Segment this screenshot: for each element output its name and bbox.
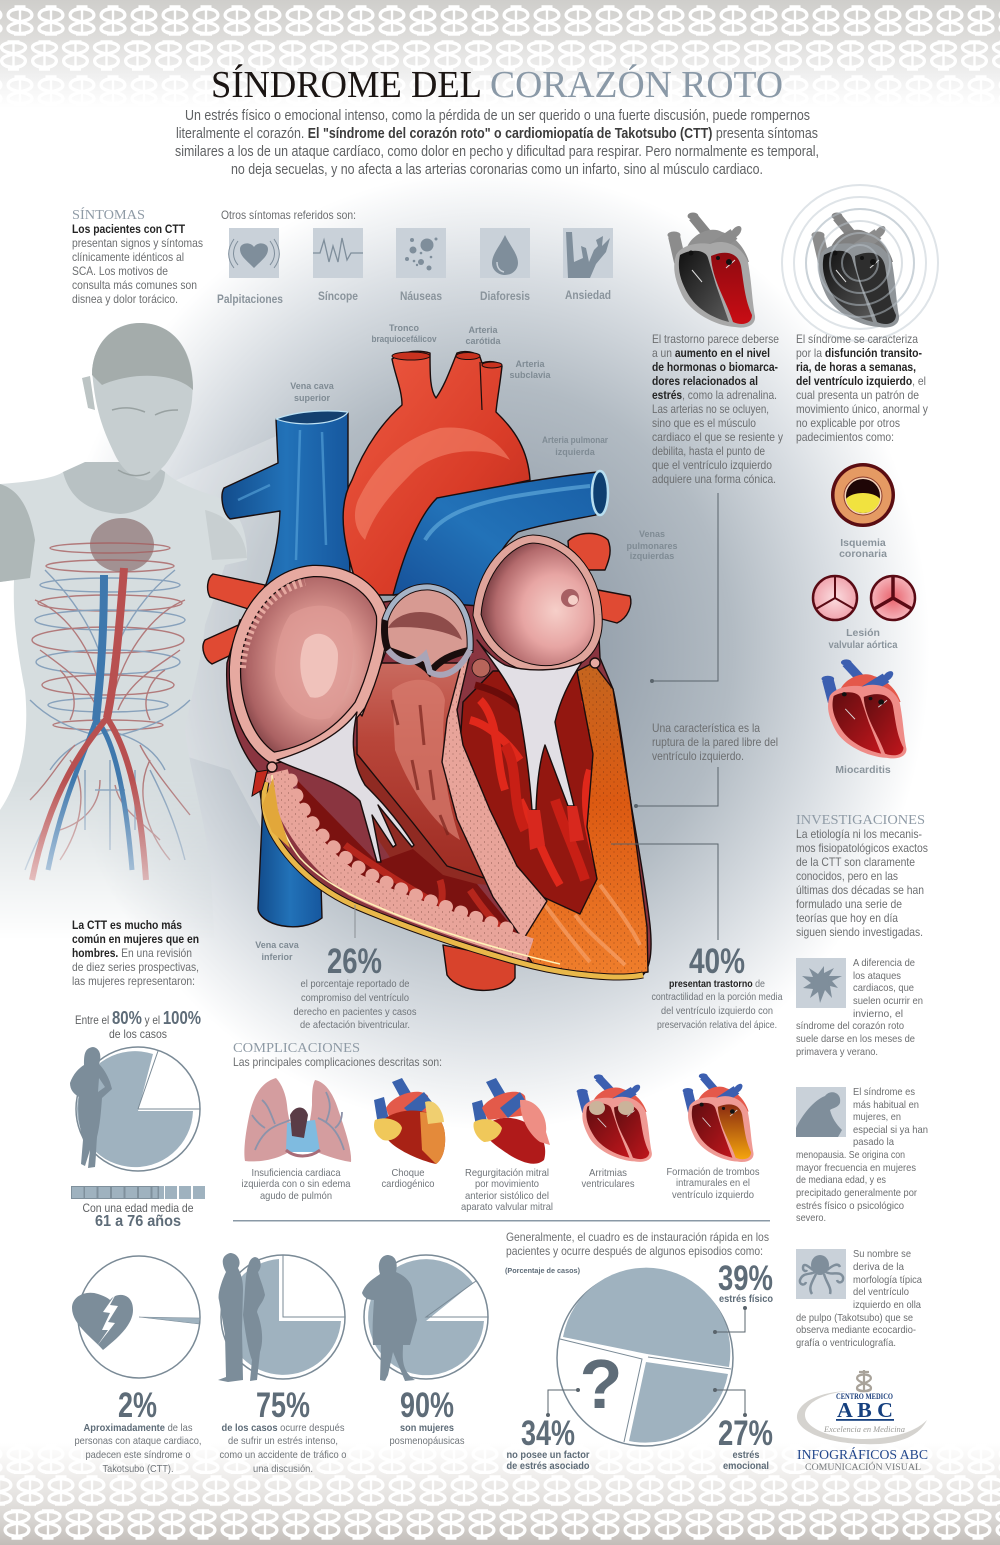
text: 40 por ciento: preservación relativa del ápice. [657,1019,777,1031]
labels: complicaciones: ventriculares [582,1178,634,1190]
label: 27 por ciento: 27% [718,1414,773,1453]
panel: síntomas text [72,206,203,306]
icon: miocarditis [822,659,906,758]
note: menopausia: El síndrome es [853,1086,915,1098]
panel: investigaciones: mos fisiopatológicos exactos [796,841,928,855]
labels: síntomas: Náuseas [400,289,442,303]
text: trastorno: dores relacionados al [652,374,758,388]
labels: complicaciones: Regurgitación mitral [465,1167,549,1179]
panel: síntomas text: SÍNTOMAS [72,206,145,223]
scalloped right ventricular wall [276,772,530,950]
panel: investigaciones: formulado una serie de [796,897,902,911]
label: isquemia coronaria: Isquemia [840,537,886,549]
labels: síntomas: Palpitaciones [217,292,283,306]
panel: síntomas text: clínicamente idénticos al [72,250,184,264]
text: 26 por ciento: compromiso del ventrículo [301,992,409,1004]
icon: gray heart with concentric rings [782,185,938,341]
labels: complicaciones: Formación de trombos [666,1166,760,1178]
label: lesión valvular: Lesión [846,627,880,639]
text: ruptura: ventrículo izquierdo. [652,749,744,763]
icon: pulpo [796,1249,846,1299]
logo: centro medico ABC [797,1370,928,1473]
text: trastorno [652,332,783,486]
text: trastorno: estrés, como la adrenalina. [652,388,777,402]
vessel: vena cava superior [222,411,350,592]
panel: síntomas text: presentan signos y síntomas [72,236,203,250]
text: trastorno: que el ventrículo izquierdo [652,458,772,472]
text: ruptura [652,721,778,763]
labels: heart anatomy: izquierdas [630,551,674,561]
note: takotsubo [796,1248,922,1349]
labels: complicaciones: intramurales en el [676,1177,750,1189]
text: 40 por ciento: presentan trastorno de [669,978,765,990]
text: edad media: Con una edad media de [82,1201,194,1215]
labels: síntomas: Ansiedad [565,288,611,302]
panel: investigaciones: siguen siendo investigadas. [796,925,923,939]
text: 75 por ciento: una discusión. [253,1463,313,1475]
title: CORAZÓN ROTO [490,64,783,106]
text: 2 por ciento [74,1386,202,1475]
labels: síntomas [217,288,611,306]
vessel: arteria pulmonar izquierda [393,471,608,620]
labels: heart anatomy: Venas [639,529,665,539]
text: disfunción: ria, de horas a semanas, [796,360,916,374]
text: disfunción: del ventrículo izquierdo, el [796,374,926,388]
labels: complicaciones: por movimiento [475,1178,539,1190]
text: 75 por ciento: de sufrir un estrés intenso, [228,1435,338,1447]
panel: investigaciones: conocidos, pero en las [796,869,898,883]
heart anatomical illustration [203,351,651,990]
text: mujeres: La CTT es mucho más [72,918,182,932]
panel: síntomas text: disnea y dolor torácico. [72,292,178,306]
icon: gray heart with red ventricle [668,212,755,328]
labels: heart anatomy: Vena cava [290,381,335,391]
chart: pie estrés [557,1268,733,1446]
text: 2 por ciento: personas con ataque cardiaco, [74,1435,202,1447]
chart: pie 2 por ciento [72,1256,200,1378]
human body figure with circulatory system [0,323,247,950]
note: menopausia: más habitual en [853,1099,919,1111]
panel: investigaciones: La etiología ni los mecanis- [796,827,922,841]
note: estacionalidad: suele darse en los meses de [796,1033,915,1045]
logo: centro medico ABC: A B C [837,1398,893,1422]
title [211,64,783,106]
text: 40 por ciento [652,942,783,1031]
labels: complicaciones: Choque [392,1167,425,1179]
note: estacionalidad: cardiacos, que [853,982,914,994]
labels: complicaciones: Arritmias [589,1167,627,1179]
labels: heart anatomy: carótida [465,336,501,346]
text: ruptura: Una característica es la [652,721,760,735]
text: 40 por ciento: 40% [689,942,745,981]
icon: silueta de pareja [218,1253,265,1382]
note: menopausia: mujeres, en [853,1111,901,1123]
icon: mujer sentada [796,1087,846,1137]
chart: age range bar [71,1186,205,1199]
text: trastorno: adquiere una forma cónica. [652,472,776,486]
labels: complicaciones [242,1166,760,1213]
note: menopausia: de mediana edad, y es [796,1174,886,1186]
labels: complicaciones: anterior sistólico del [465,1190,549,1202]
label: 27 por ciento: estrés [732,1449,760,1461]
chart: pie mujeres [70,1047,200,1171]
logo: centro medico ABC: COMUNICACIÓN VISUAL [805,1461,921,1473]
note: takotsubo: del ventrículo [853,1286,909,1298]
labels: síntomas: Diaforesis [480,289,530,303]
note: estacionalidad: los ataques [853,970,901,982]
label: 39 por ciento: 39% [718,1259,773,1298]
note: menopausia: severo. [796,1212,826,1224]
icon: arritmias ventriculares [577,1074,652,1162]
note: takotsubo: morfología típica [853,1274,922,1286]
icon: silueta de mujer [70,1047,112,1168]
text: disfunción [796,332,928,444]
text: trastorno: de hormonas o biomarca- [652,360,778,374]
right ventricle cavity [297,745,523,940]
panel: investigaciones [796,813,928,939]
icon: corazón roto [72,1292,133,1350]
icon: válvula aórtica normal [813,576,857,620]
note: estacionalidad: primavera y verano. [796,1046,878,1058]
intro paragraph [175,108,819,178]
text: trastorno: debilita, hasta el punto de [652,444,765,458]
footer pattern band [0,1443,1000,1545]
interventricular septum [355,622,547,940]
title: SÍNDROME DEL [211,64,482,106]
text: 2 por ciento: Takotsubo (CTT). [102,1463,174,1475]
panel: complicaciones heading: Las principales complicaciones descritas son: [233,1055,442,1069]
labels: heart anatomy: Arteria [515,359,545,369]
labels: heart anatomy: braquiocefálicov [372,334,436,344]
text: instauración: Generalmente, el cuadro es de instauración rápida en los [506,1230,769,1244]
icon: náuseas [396,228,446,278]
icon: síncope [313,228,363,278]
note: menopausia: estrés físico o psicológico [796,1200,904,1212]
vessel: aorta inferior [443,945,515,990]
label: 34 por ciento: de estrés asociado [506,1460,590,1472]
icon: pulmones [244,1078,351,1162]
text: 90 por ciento: son mujeres [400,1422,454,1434]
text: edad media [82,1201,194,1230]
text: mujeres [72,918,199,988]
yellow pericardium band [252,770,643,977]
labels: complicaciones: aparato valvular mitral [461,1201,553,1213]
text: trastorno: El trastorno parece deberse [652,332,779,346]
intro paragraph: Un estrés físico o emocional intenso, como la pérdida de un ser querido o una fuerte discusión, puede rompernos [185,108,810,124]
icon: signo de interrogación: ? [580,1345,622,1423]
text: 2 por ciento: Aproximadamente de las [84,1422,192,1434]
note: menopausia: menopausia. Se origina con [796,1149,905,1161]
text: disfunción: cual presenta un patrón de [796,388,919,402]
text: 90 por ciento [390,1386,464,1447]
label: isquemia coronaria: coronaria [839,548,887,560]
labels: heart anatomy [255,323,678,962]
text: instauración: pacientes y ocurre después de algunos episodios como: [506,1244,763,1258]
icon: ansiedad [563,228,613,278]
central outflow chamber [357,663,487,879]
intro paragraph: similares a los de un ataque cardíaco, como dolor en pecho y dificultad para respirar. Pero normalmente es temporal, [175,144,819,160]
text: disfunción: por la disfunción transito- [796,346,922,360]
text: mujeres: las mujeres representaron: [72,974,195,988]
text: 40 por ciento: contractilidad en la porción media [652,991,783,1003]
note: takotsubo: deriva de la [853,1261,904,1273]
note: estacionalidad: A diferencia de [853,957,915,969]
intro paragraph: literalmente el corazón. El "síndrome del corazón roto" o cardiomiopatía de Takotsubo (CTT) presenta síntomas [176,126,818,142]
text: disfunción: movimiento único, anormal y [796,402,928,416]
labels: heart anatomy: Tronco [389,323,419,333]
text: instauración [505,1230,769,1275]
icon: válvula aórtica lesionada [871,576,915,620]
panel: síntomas text: SCA. Los motivos de [72,264,168,278]
icon: isquemia coronaria [831,463,895,527]
note: estacionalidad: suelen ocurrir en [853,995,923,1007]
logo: centro medico ABC: CENTRO MEDICO [836,1391,893,1401]
text: 26 por ciento: el porcentaje reportado de [300,978,410,990]
text: 75 por ciento: de los casos ocurre después [222,1422,344,1434]
connector lines [355,493,718,940]
icon: regurgitación mitral [472,1078,550,1164]
right atrium [235,571,382,758]
chordae: right ventricle [267,712,414,862]
note: menopausia: mayor frecuencia en mujeres [796,1162,916,1174]
labels: síntomas: Síncope [318,289,358,303]
logo: centro medico ABC: Excelencia en Medicina [823,1425,905,1434]
text: trastorno: sino que es el músculo [652,416,756,430]
intro paragraph: no deja secuelas, y no afecta a las arterias coronarias como un infarto, sino al músculo cardiaco. [231,162,763,178]
labels: complicaciones: Insuficiencia cardiaca [252,1167,341,1179]
text: trastorno: a un aumento en el nivel [652,346,770,360]
connectors: pie estrés [546,1306,746,1416]
text: 26 por ciento: derecho en pacientes y casos [294,1006,416,1018]
text: 40 por ciento: del ventrículo izquierdo con [661,1005,773,1017]
label: 27 por ciento [718,1414,773,1472]
text: entre 80 y 100: de los casos [109,1027,167,1041]
text: 90 por ciento: posmenopáusicas [390,1435,464,1447]
labels: heart anatomy: subclavia [509,370,552,380]
left atrium [477,539,598,670]
panel: investigaciones: de la CTT son claramente [796,855,915,869]
label: 34 por ciento: no posee un factor [506,1449,590,1461]
panel: síntomas text: consulta más comunes son [72,278,197,292]
note: menopausia: precipitado generalmente por [796,1187,917,1199]
text: 26 por ciento [294,942,416,1031]
labels: heart anatomy: superior [294,393,330,403]
note: takotsubo: observa mediante ecocardio- [796,1324,916,1336]
labels: heart anatomy: Arteria pulmonar [542,435,608,445]
label: 34 por ciento [506,1414,590,1472]
panel: investigaciones: últimas dos décadas se han [796,883,924,897]
labels: complicaciones: cardiogénico [382,1178,435,1190]
note: estacionalidad: invierno, el [853,1008,903,1020]
text: 2 por ciento: 2% [118,1386,157,1425]
text: edad media: 61 a 76 años [95,1213,181,1230]
icon: palpitaciones [229,228,279,278]
orange ventricular wall [517,663,648,975]
label: isquemia coronaria [839,537,887,560]
text: 2 por ciento: padecen este síndrome o [86,1449,191,1461]
note: takotsubo: Su nombre se [853,1248,911,1260]
panel: complicaciones heading: COMPLICACIONES [233,1041,360,1056]
label: 34 por ciento: 34% [521,1414,575,1453]
text: instauración: (Porcentaje de casos) [505,1266,580,1275]
note: takotsubo: de pulpo (Takotsubo) que se [796,1312,913,1324]
panel: investigaciones: teorías que hoy en día [796,911,898,925]
text: mujeres: de diez series prospectivas, [72,960,199,974]
text: mujeres: hombres. En una revisión [72,946,192,960]
logo: centro medico ABC: INFOGRÁFICOS ABC [797,1446,928,1463]
label: 39 por ciento: estrés físico [719,1293,773,1305]
icon: formación de trombos [683,1073,754,1162]
panel: investigaciones: INVESTIGACIONES [796,813,925,828]
vessel: vena cava inferior [258,800,322,927]
labels: complicaciones: ventrículo izquierdo [672,1189,754,1201]
text: disfunción: padecimientos como: [796,430,894,444]
text: 75 por ciento: como un accidente de tráfico o [220,1449,347,1461]
chart: pie 90 por ciento [362,1255,488,1381]
note: menopausia: especial si ya han [853,1124,928,1136]
label: 39 por ciento [718,1259,773,1305]
icon: choque cardiogénico [374,1078,445,1164]
labels: heart anatomy: izquierda [555,447,596,457]
text: entre 80 y 100: Entre el 80% y el 100% [75,1008,201,1028]
labels: complicaciones: izquierda con o sin edema [242,1178,351,1190]
text: ruptura: ruptura de la pared libre del [652,735,778,749]
text: disfunción: no explicable por otros [796,416,900,430]
panel: complicaciones heading [233,1041,442,1069]
text: 75 por ciento: 75% [256,1386,310,1425]
icon: diaforesis [480,228,530,278]
note: takotsubo: grafía o ventriculografía. [796,1337,896,1349]
chart: pie 75 por ciento [218,1253,345,1382]
icon: sol [796,958,846,1008]
left ventricle cavity [460,671,640,918]
note: menopausia [796,1086,928,1224]
header pattern band [0,0,1000,108]
text: entre 80 y 100 [75,1008,201,1041]
text: 26 por ciento: 26% [327,942,382,981]
label: 27 por ciento: emocional [723,1460,769,1472]
heart body [227,600,651,977]
label: lesión valvular: valvular aórtica [828,639,898,651]
icon: silueta mujer mayor [362,1255,417,1381]
text: trastorno: Las arterias no se ocluyen, [652,402,769,416]
note: menopausia: pasado la [853,1136,894,1148]
labels: complicaciones: agudo de pulmón [260,1190,332,1202]
note: estacionalidad [796,957,923,1058]
aortic valve ring [384,587,490,677]
labels: heart anatomy: Arteria [468,325,498,335]
labels: heart anatomy: Vena cava [255,940,300,950]
text: 26 por ciento: de afectación biventricular. [300,1019,410,1031]
chordae: left ventricle [477,640,600,850]
note: takotsubo: izquierdo en olla [853,1299,921,1311]
label: lesión valvular [828,627,898,651]
note: estacionalidad: síndrome del corazón roto [796,1020,904,1032]
labels: heart anatomy: inferior [261,952,293,962]
labels: heart anatomy: pulmonares [626,541,678,551]
text: otros síntomas: Otros síntomas referidos son: [221,208,356,222]
vessel: arco aórtico [343,351,530,595]
text: disfunción: El síndrome se caracteriza [796,332,918,346]
text: mujeres: común en mujeres que en [72,932,199,946]
label: miocarditis: Miocarditis [835,764,891,776]
text: 90 por ciento: 90% [400,1386,454,1425]
text: 75 por ciento [220,1386,347,1475]
panel: síntomas text: Los pacientes con CTT [72,222,186,236]
vessels: venas pulmonares [203,533,631,664]
text: trastorno: cardiaco el que se resiente y [652,430,783,444]
